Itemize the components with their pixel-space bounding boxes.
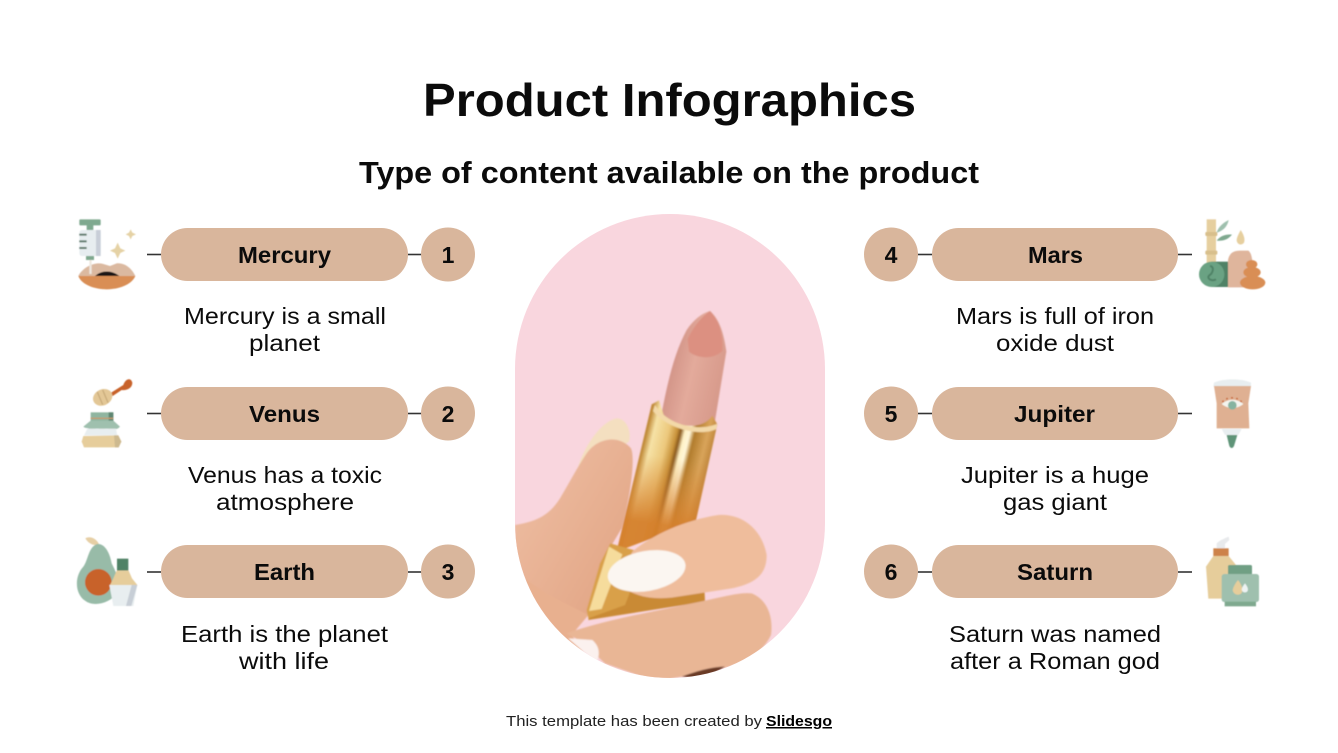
icon: pump bottle and jar	[1206, 537, 1259, 606]
item 2: Venus: 2	[442, 401, 454, 427]
item 3: Earth: Earth is the planet	[181, 621, 389, 647]
item 1: Mercury: 1	[442, 242, 455, 268]
item 4: Mars: 4	[885, 242, 898, 268]
item 5: Jupiter: Jupiter is a huge	[961, 462, 1149, 488]
item 1: Mercury: Mercury is a small	[184, 303, 386, 329]
item 4: Mars: Mars is full of iron	[956, 303, 1154, 329]
icon: avocado and bottle	[77, 537, 137, 606]
icon: tube with eye	[1213, 379, 1251, 448]
item 3: Earth: Earth	[254, 559, 315, 585]
panel: right column items	[864, 228, 1192, 674]
item 4: Mars: Mars	[1028, 242, 1083, 268]
item 5: Jupiter	[864, 386, 1192, 515]
item 6: Saturn: Saturn	[1017, 559, 1093, 585]
footer credit: Slidesgo	[766, 713, 832, 730]
item 5: Jupiter: gas giant	[1003, 489, 1108, 515]
icon: honey jar and dipper	[82, 379, 132, 447]
item 3: Earth: with life	[238, 648, 329, 674]
item 6: Saturn: after a Roman god	[950, 648, 1160, 674]
item 3: Earth	[147, 544, 475, 674]
item 1: Mercury: planet	[249, 330, 321, 356]
item 6: Saturn: 6	[885, 559, 897, 585]
item 4: Mars: oxide dust	[996, 330, 1115, 356]
icon: syringe and lips	[78, 219, 136, 289]
item 5: Jupiter: 5	[885, 401, 898, 427]
item 2: Venus: atmosphere	[216, 489, 354, 515]
item 1: Mercury: Mercury	[238, 242, 331, 268]
panel: left column items	[147, 228, 475, 674]
item 6: Saturn	[864, 544, 1192, 674]
subtitle: Type of content available on the product	[359, 155, 979, 190]
item 3: Earth: 3	[442, 559, 454, 585]
icon: bamboo, towel and stones	[1199, 219, 1265, 289]
item 6: Saturn: Saturn was named	[949, 621, 1161, 647]
central photo: hand holding lipstick	[515, 214, 825, 678]
item 2: Venus: Venus has a toxic	[188, 462, 382, 488]
item 1: Mercury	[147, 228, 475, 356]
item 4: Mars	[864, 228, 1192, 356]
footer credit: This template has been created by	[506, 713, 763, 730]
item 2: Venus: Venus	[249, 401, 320, 427]
item 2: Venus	[147, 386, 475, 515]
item 5: Jupiter: Jupiter	[1014, 401, 1095, 427]
title: Product Infographics	[423, 74, 916, 126]
